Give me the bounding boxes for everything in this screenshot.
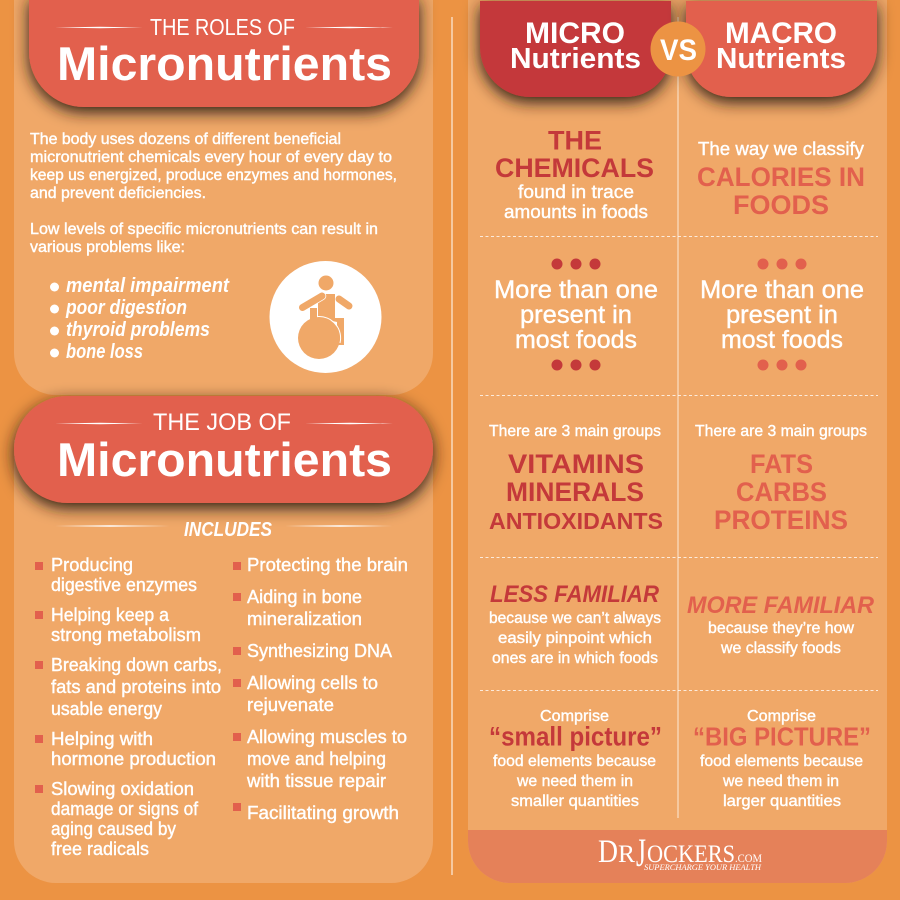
heading: the roles of micronutrients — [29, 0, 419, 107]
row 1 micro: the chemicals: found in trace — [518, 182, 634, 202]
row 5 micro: small picture: Comprise — [540, 708, 609, 725]
heading: the roles of micronutrients: THE ROLES OF — [150, 14, 295, 40]
footer: drjockers logo band: D — [598, 834, 618, 870]
text block: introduction: keep us energized, produce enzymes and hormones, — [30, 167, 397, 184]
footer: drjockers logo band — [468, 830, 887, 883]
text block: introduction — [30, 131, 397, 256]
row 4 micro: less familiar: easily pinpoint which — [498, 630, 652, 647]
list: left column of jobs: Helping with — [51, 729, 153, 749]
heading: micro nutrients: MICRO — [525, 17, 625, 50]
list: left column of jobs: Breaking down carbs, — [51, 655, 222, 675]
row 1 micro: the chemicals — [495, 126, 654, 222]
text block: introduction: and prevent deficiencies. — [30, 185, 206, 202]
list: right column of jobs: Facilitating growth — [247, 803, 399, 823]
row 4 micro: less familiar — [489, 581, 661, 667]
row 3 micro: main groups: MINERALS — [506, 477, 644, 507]
list: left column of jobs: Producing — [51, 555, 133, 575]
row 4 macro: more familiar: we classify foods — [720, 640, 841, 657]
text block: introduction: various problems like: — [30, 239, 185, 256]
row 5 macro: big picture: food elements because — [700, 753, 863, 770]
list: right column of jobs: Aiding in bone — [247, 587, 362, 607]
row 4 macro: more familiar: because they’re how — [708, 620, 854, 637]
row 5 macro: big picture — [693, 708, 871, 810]
row 2 macro: more than one: most foods — [721, 326, 843, 354]
list: left column of jobs — [35, 555, 222, 859]
row 3 macro: main groups: There are 3 main groups — [695, 423, 867, 440]
list: right column of jobs: Synthesizing DNA — [247, 641, 392, 661]
panel: roles of micronutrients — [14, 0, 433, 395]
row 1 macro: calories in foods: The way we classify — [698, 139, 864, 159]
list: right column of jobs: Protecting the brain — [247, 555, 408, 575]
heading: the job of micronutrients: THE JOB OF — [153, 409, 291, 436]
heading: micro nutrients — [480, 1, 671, 97]
row 3 micro: main groups: There are 3 main groups — [489, 423, 661, 440]
list: left column of jobs: aging caused by — [51, 819, 176, 839]
footer: drjockers logo band: .COM — [735, 851, 762, 865]
row 5 macro: big picture: “BIG PICTURE” — [693, 722, 871, 752]
list: right column of jobs: rejuvenate — [247, 695, 334, 715]
row 1 micro: the chemicals: THE — [548, 126, 602, 156]
list: right column of jobs: with tissue repair — [246, 771, 386, 791]
row 2 macro: more than one — [700, 258, 864, 370]
badge: vs: VS — [660, 34, 697, 67]
row 4 macro: more familiar — [687, 592, 875, 657]
heading: macro nutrients: MACRO — [725, 17, 837, 50]
row 2 micro: more than one: More than one — [494, 276, 658, 304]
row 2 macro: more than one: More than one — [700, 276, 864, 304]
row 1 micro: the chemicals: amounts in foods — [504, 202, 648, 222]
row 3 micro: main groups — [489, 423, 663, 534]
row 2 micro: more than one — [494, 258, 658, 370]
row 1 macro: calories in foods — [697, 139, 865, 220]
list: deficiency problems: bone loss — [66, 341, 143, 363]
row 1 micro: the chemicals: CHEMICALS — [495, 153, 654, 183]
row 5 macro: big picture: we need them in — [722, 773, 839, 790]
list: right column of jobs: Allowing muscles to — [247, 727, 407, 747]
row 5 micro: small picture: “small picture” — [489, 722, 662, 752]
heading: the job of micronutrients — [14, 396, 433, 503]
list: right column of jobs: mineralization — [247, 609, 362, 629]
list: right column of jobs: Allowing cells to — [247, 673, 378, 693]
subheading: includes: INCLUDES — [184, 519, 273, 541]
text block: introduction: Low levels of specific micronutrients can result in — [30, 221, 378, 238]
row 1 macro: calories in foods: CALORIES IN — [697, 162, 865, 192]
list: right column of jobs: move and helping — [247, 749, 386, 769]
row 2 micro: more than one: most foods — [515, 326, 637, 354]
badge: vs — [650, 22, 706, 76]
list: left column of jobs: Helping keep a — [51, 605, 170, 625]
row 3 micro: main groups: VITAMINS — [508, 449, 644, 479]
row 5 micro: small picture — [489, 708, 662, 810]
row 3 macro: main groups: PROTEINS — [714, 505, 848, 535]
row 5 macro: big picture: larger quantities — [723, 793, 841, 810]
row 5 micro: small picture: we need them in — [516, 773, 633, 790]
text block: introduction: The body uses dozens of different beneficial — [30, 131, 341, 148]
row 5 macro: big picture: Comprise — [747, 708, 816, 725]
list: left column of jobs: usable energy — [51, 699, 162, 719]
list: left column of jobs: fats and proteins into — [51, 677, 221, 697]
row 5 micro: small picture: smaller quantities — [511, 793, 639, 810]
list: deficiency problems: poor digestion — [65, 297, 187, 319]
list: deficiency problems: mental impairment — [66, 275, 230, 297]
row 2 macro: more than one: present in — [726, 301, 838, 329]
row 3 macro: main groups: CARBS — [736, 477, 827, 507]
heading: macro nutrients: Nutrients — [716, 43, 846, 75]
list: left column of jobs: damage or signs of — [51, 799, 199, 819]
footer: drjockers logo band: R — [618, 841, 635, 868]
row 3 micro: main groups: ANTIOXIDANTS — [489, 508, 663, 534]
list: deficiency problems — [50, 275, 230, 363]
row 1 macro: calories in foods: FOODS — [733, 190, 829, 220]
text block: introduction: micronutrient chemicals every hour of every day to — [30, 149, 392, 166]
list: deficiency problems: thyroid problems — [66, 319, 210, 341]
list: left column of jobs: hormone production — [51, 749, 216, 769]
list: left column of jobs: free radicals — [51, 839, 149, 859]
row 4 macro: more familiar: MORE FAMILIAR — [687, 592, 875, 619]
footer: drjockers logo band: OCKERS — [647, 841, 735, 868]
row 2 micro: more than one: present in — [520, 301, 632, 329]
row 4 micro: less familiar: because we can’t always — [489, 610, 661, 627]
footer: drjockers logo band: SUPERCHARGE YOUR HEALTH — [644, 862, 762, 872]
heading: micro nutrients: Nutrients — [510, 43, 641, 75]
list: left column of jobs: digestive enzymes — [51, 575, 197, 595]
row 3 macro: main groups — [695, 423, 867, 535]
heading: the roles of micronutrients: Micronutrients — [57, 37, 392, 90]
row 3 macro: main groups: FATS — [750, 449, 813, 479]
row 4 micro: less familiar: LESS FAMILIAR — [490, 581, 660, 608]
footer: drjockers logo band: J — [636, 830, 646, 875]
list: left column of jobs: Slowing oxidation — [51, 779, 194, 799]
row 5 micro: small picture: food elements because — [493, 753, 656, 770]
panel: job of micronutrients — [14, 396, 433, 883]
list: left column of jobs: strong metabolism — [51, 625, 201, 645]
list: right column of jobs — [233, 555, 408, 823]
panel: micro vs macro comparison — [468, 0, 887, 883]
heading: macro nutrients — [686, 1, 877, 97]
row 4 micro: less familiar: ones are in which foods — [492, 650, 658, 667]
icon: person in wheelchair — [270, 261, 382, 373]
heading: the job of micronutrients: Micronutrients — [57, 433, 392, 486]
